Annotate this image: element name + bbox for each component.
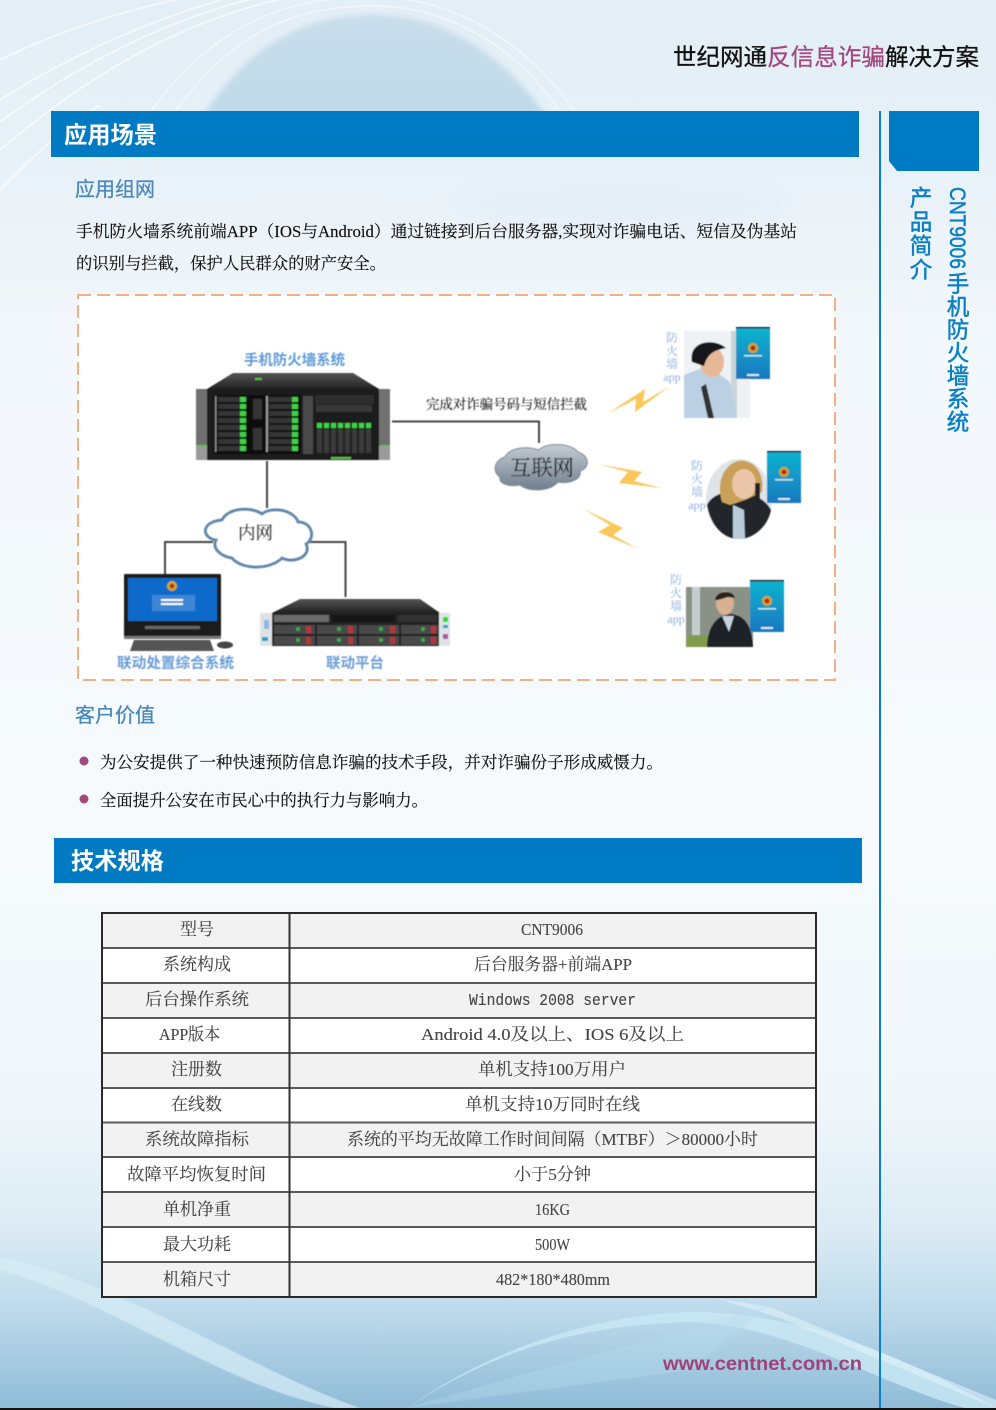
heading bar: 技术规格: 技术规格 <box>71 848 164 874</box>
icon: linkage server <box>260 599 450 646</box>
table: technical specifications <box>102 913 816 1297</box>
icon: lightning bolts <box>582 386 670 549</box>
table: technical specifications: 系统故障指标 <box>145 1130 250 1149</box>
page title: 世纪网通 <box>673 44 767 70</box>
sidebar subtitle: 品 <box>910 210 932 235</box>
icon: internet cloud: 互联网 <box>510 456 574 480</box>
table: technical specifications: 单机净重 <box>163 1200 231 1219</box>
table: technical specifications: 在线数 <box>171 1095 222 1114</box>
table: technical specifications: 故障平均恢复时间 <box>127 1165 266 1184</box>
table: technical specifications: APP版本 <box>159 1025 220 1044</box>
callout: user 3 <box>667 573 784 647</box>
intro paragraph: 的识别与拦截，保护人民群众的财产安全。 <box>76 254 386 273</box>
callout: user 2: 火 <box>691 471 703 486</box>
table: technical specifications: Windows 2008 server <box>469 992 636 1011</box>
callout: user 1: 防 <box>666 331 678 345</box>
sidebar title: 防 <box>947 318 969 343</box>
label: linkage platform: 联动平台 <box>326 654 384 672</box>
sidebar title: 火 <box>947 341 969 366</box>
heading bar: 应用场景: 应用场景 <box>64 122 157 148</box>
sidebar <box>879 111 979 1408</box>
icon: firewall server <box>196 373 390 460</box>
subheading: 应用组网: 应用组网 <box>75 178 155 201</box>
website url: www.centnet.com.cn <box>662 1354 862 1375</box>
bullet: value 1: 为公安提供了一种快速预防信息诈骗的技术手段，并对诈骗份子形成威慑力。 <box>100 753 663 772</box>
sidebar subtitle: 简 <box>910 234 932 259</box>
sidebar title: 系 <box>947 387 969 412</box>
sidebar subtitle: 产 <box>910 186 932 211</box>
callout: user 3: 墙 <box>670 598 682 613</box>
page title: 反信息诈骗 <box>767 44 885 70</box>
page title <box>673 44 979 70</box>
intro paragraph <box>76 222 797 273</box>
table: technical specifications: 系统的平均无故障工作时间间隔（MTBF）＞80000小时 <box>347 1130 758 1149</box>
callout: user 1: 墙 <box>666 356 678 371</box>
sidebar title <box>945 187 970 435</box>
bullet: value 2: 全面提升公安在市民心中的执行力与影响力。 <box>100 791 428 810</box>
callout: user 1 <box>663 327 770 418</box>
icon: internal network cloud: 内网 <box>238 523 273 543</box>
heading bar: 应用场景 <box>51 111 859 157</box>
sidebar title: 手 <box>947 272 969 297</box>
table: technical specifications: 单机支持10万同时在线 <box>465 1095 640 1114</box>
callout: user 3: 火 <box>670 585 682 600</box>
sidebar subtitle <box>910 186 932 283</box>
callout: user 2 <box>688 451 801 539</box>
callout: user 2: 墙 <box>691 484 703 499</box>
table: technical specifications: Android 4.0及以上、IOS 6及以上 <box>421 1025 684 1044</box>
callout: user 2: app <box>688 498 706 512</box>
sidebar title: CNT9006 <box>945 187 970 269</box>
heading bar: 技术规格 <box>54 838 862 883</box>
sidebar title: 机 <box>947 295 970 320</box>
icon: internal network cloud <box>205 509 312 567</box>
table: technical specifications: 最大功耗 <box>163 1235 231 1254</box>
callout: user 3: app <box>667 612 685 626</box>
sidebar subtitle: 介 <box>910 258 932 283</box>
table: technical specifications: 500W <box>535 1235 571 1254</box>
table: technical specifications: CNT9006 <box>521 920 583 939</box>
panel: network diagram <box>78 295 835 680</box>
table: technical specifications: 16KG <box>535 1200 570 1219</box>
table: technical specifications: 型号 <box>180 920 214 939</box>
table: technical specifications: 系统构成 <box>163 955 231 974</box>
icon: workstation <box>124 574 233 651</box>
label: firewall system: 手机防火墙系统 <box>244 351 345 369</box>
table: technical specifications: 后台操作系统 <box>145 990 249 1009</box>
table: technical specifications: 单机支持100万用户 <box>478 1060 626 1079</box>
callout: user 1: app <box>663 370 681 384</box>
callout: user 3: 防 <box>670 573 682 587</box>
table: technical specifications: 后台服务器+前端APP <box>474 955 632 974</box>
icon: internet cloud <box>495 444 587 490</box>
table: technical specifications: 482*180*480mm <box>496 1270 610 1289</box>
subheading: 客户价值: 客户价值 <box>75 704 155 727</box>
intro paragraph: 手机防火墙系统前端APP（IOS与Android）通过链接到后台服务器,实现对诈骗电话、短信及伪基站 <box>76 222 797 241</box>
label: linkage system: 联动处置综合系统 <box>117 654 235 672</box>
callout: user 1: 火 <box>666 343 678 358</box>
table: technical specifications: 小于5分钟 <box>514 1165 591 1184</box>
callout: user 2: 防 <box>691 459 703 473</box>
label: interception: 完成对诈骗号码与短信拦截 <box>426 396 587 412</box>
table: technical specifications: 机箱尺寸 <box>163 1270 231 1289</box>
sidebar title: 统 <box>947 410 969 435</box>
page title: 解决方案 <box>885 44 979 70</box>
connector lines <box>165 422 539 597</box>
table: technical specifications: 注册数 <box>171 1060 222 1079</box>
sidebar title: 墙 <box>947 364 969 389</box>
